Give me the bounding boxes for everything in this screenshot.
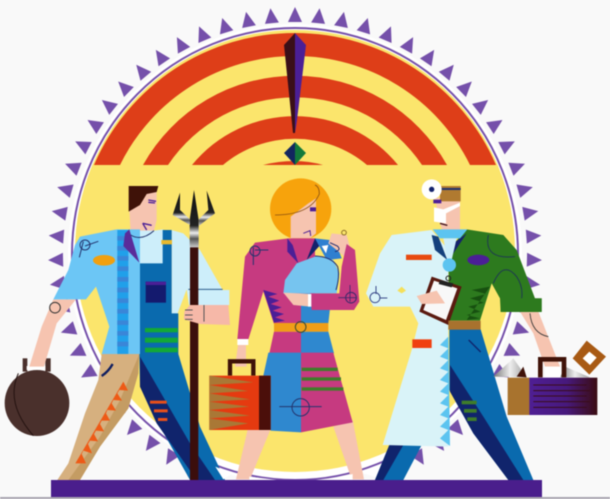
stethoscope and collar [432,229,467,272]
toolbox [493,341,606,415]
arm [520,312,560,367]
shirt [53,229,229,354]
jeans lower-left leg [375,445,422,480]
yellow sun disc with ring [68,24,522,484]
trousers blue [139,354,225,480]
dress symbols [250,246,322,416]
clipboard [417,276,462,325]
figure: farmer [5,186,230,480]
hair [129,186,158,212]
overalls [140,230,178,354]
hand and cuff [235,339,248,367]
head [422,179,461,233]
face [275,185,319,246]
coat [366,230,450,447]
belt [274,322,328,332]
green side [448,229,542,321]
trousers tan [57,354,139,480]
pitchfork [173,190,215,480]
baby [283,230,349,293]
base platform [0,480,610,499]
jeans [449,329,533,480]
hand [184,305,230,325]
cuff [501,298,542,312]
near arm [283,244,359,310]
legs [236,420,364,479]
arm and head [29,191,157,367]
figure: doctor [366,179,606,480]
weight bag [5,358,69,436]
figure: mother with baby [209,178,380,481]
belt [448,321,481,330]
red concentric arcs [94,33,496,165]
shoes [215,465,380,481]
briefcase [209,361,271,430]
sunburst triangles [48,7,542,480]
exclamation mark [284,33,306,165]
dress [237,238,353,432]
hair [270,178,331,240]
